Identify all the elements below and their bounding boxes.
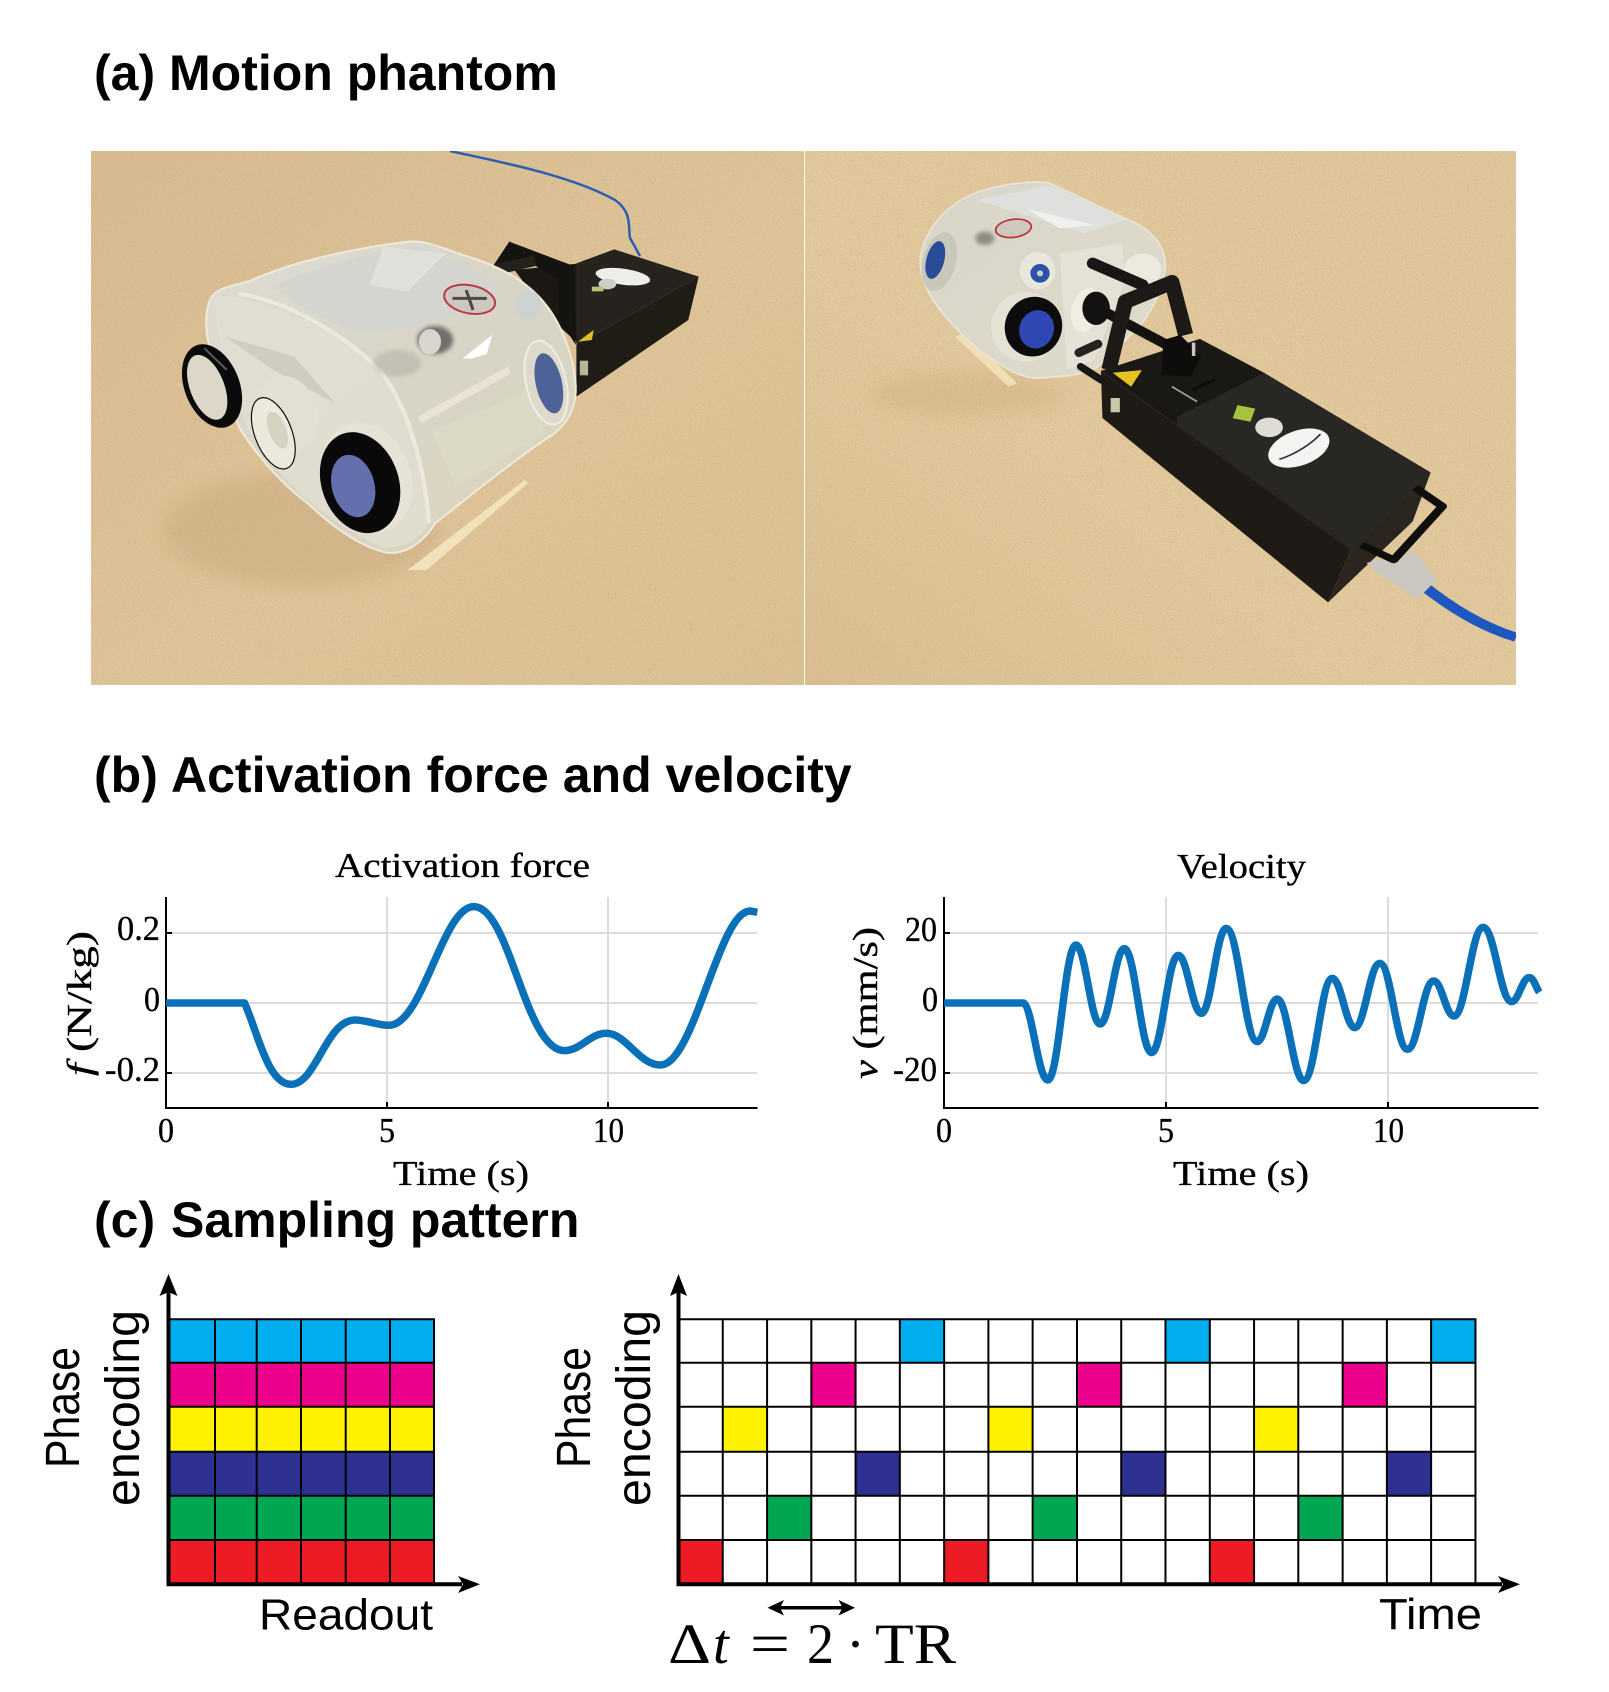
chart: velocity <box>846 847 1539 1193</box>
formula: delta t equals 2 TR: Δ <box>668 1613 711 1676</box>
warning sticker <box>994 217 1033 240</box>
label: Readout: Readout <box>259 1590 433 1639</box>
x tick labels: 10 <box>593 1111 624 1150</box>
photo: phantom, rear view with actuator <box>805 151 1516 685</box>
x tick labels: 5 <box>1158 1111 1174 1150</box>
y tick labels: -20 <box>893 1050 937 1089</box>
y tick labels: 0 <box>922 980 938 1019</box>
axis arrows <box>670 1274 1520 1593</box>
y tick labels: -0.2 <box>105 1050 160 1089</box>
double arrow: sampling interval <box>768 1600 855 1616</box>
colored phase encoding rows <box>168 1319 434 1584</box>
formula: delta t equals 2 TR: = <box>750 1613 790 1676</box>
x tick labels <box>936 1111 1404 1150</box>
black actuator box <box>494 242 699 397</box>
x tick labels <box>158 1111 624 1150</box>
formula: delta t equals 2 TR: 2 <box>807 1613 834 1676</box>
y tick labels <box>893 910 938 1089</box>
heading: (c) Sampling pattern: (c) <box>94 1192 155 1248</box>
floor shadow <box>163 473 439 587</box>
label: Phase: Phase <box>548 1347 601 1468</box>
centre port <box>1070 288 1096 332</box>
level gauge <box>1255 418 1283 437</box>
clear phantom body <box>920 182 1165 378</box>
formula: delta t equals 2 TR: t <box>713 1613 730 1676</box>
x tick labels: 5 <box>379 1111 395 1150</box>
cylinder and piston <box>1082 292 1110 325</box>
label: Time: Time <box>1379 1590 1482 1639</box>
handle <box>1361 488 1442 560</box>
right black ring with blue disc <box>306 411 427 546</box>
x tick labels: 0 <box>936 1111 952 1150</box>
black ring with blue disc <box>991 292 1050 362</box>
y tick labels: 0 <box>144 980 160 1019</box>
diagram: interleaved time sampling grid <box>548 1274 1520 1676</box>
side port with blue insert <box>524 340 569 426</box>
formula: delta t equals 2 TR <box>668 1613 956 1676</box>
sampled cells <box>678 1319 1475 1584</box>
force curve <box>166 907 757 1084</box>
small top port <box>515 290 541 320</box>
y axis label: v (mm/s) <box>846 927 885 1079</box>
small blue port <box>1020 252 1056 289</box>
left black ring <box>182 344 242 428</box>
centre open port <box>285 376 308 388</box>
side label <box>1111 398 1120 412</box>
y tick labels <box>105 909 160 1089</box>
diagram: full readout sampling grid <box>37 1274 480 1639</box>
x tick labels: 10 <box>1373 1111 1404 1150</box>
bracket <box>1109 282 1186 370</box>
metal connector <box>1367 552 1437 599</box>
heading: (a) Motion phantom: (a) Motion phantom <box>94 45 558 101</box>
heading: (c) Sampling pattern: Sampling pattern <box>171 1192 579 1248</box>
photo: phantom, front view <box>91 151 804 685</box>
label: Phase: Phase <box>37 1347 90 1468</box>
icon: blue network cable <box>450 151 640 256</box>
rods <box>1093 263 1143 285</box>
label: encoding: encoding <box>608 1310 661 1506</box>
yellow warning triangle <box>1113 370 1142 387</box>
acrylic base <box>408 480 528 570</box>
y axis label: f (N/kg) <box>60 931 99 1076</box>
clamp <box>1162 335 1201 377</box>
acrylic base <box>955 333 1017 387</box>
clear phantom body <box>206 241 576 553</box>
y tick labels: 0.2 <box>117 909 160 948</box>
x axis label: Time (s) <box>1173 1154 1309 1193</box>
axis arrows <box>160 1274 480 1593</box>
label: encoding: encoding <box>97 1310 150 1506</box>
heading: (b) Activation force and velocity: (b) <box>94 747 158 803</box>
formula: delta t equals 2 TR: · <box>846 1613 865 1676</box>
x axis label: Time (s) <box>393 1154 529 1193</box>
warning sticker <box>443 284 496 315</box>
heading: (b) Activation force and velocity: Activation force and velocity <box>171 747 852 803</box>
x tick labels: 0 <box>158 1111 174 1150</box>
green sticker <box>1233 405 1255 422</box>
actuator box body <box>1101 339 1431 602</box>
blue cable <box>1420 584 1516 637</box>
glint <box>463 335 492 359</box>
chart title: Activation force <box>335 846 590 885</box>
chart title: Velocity <box>1177 847 1307 886</box>
side port <box>922 232 957 291</box>
y tick labels: 20 <box>905 910 937 949</box>
dark internal cylinder <box>417 326 453 354</box>
logo sticker <box>1268 428 1330 468</box>
formula: delta t equals 2 TR: TR <box>875 1613 956 1676</box>
floor shadow <box>884 375 1054 412</box>
chart: activation force <box>60 846 758 1193</box>
velocity curve <box>944 927 1539 1081</box>
